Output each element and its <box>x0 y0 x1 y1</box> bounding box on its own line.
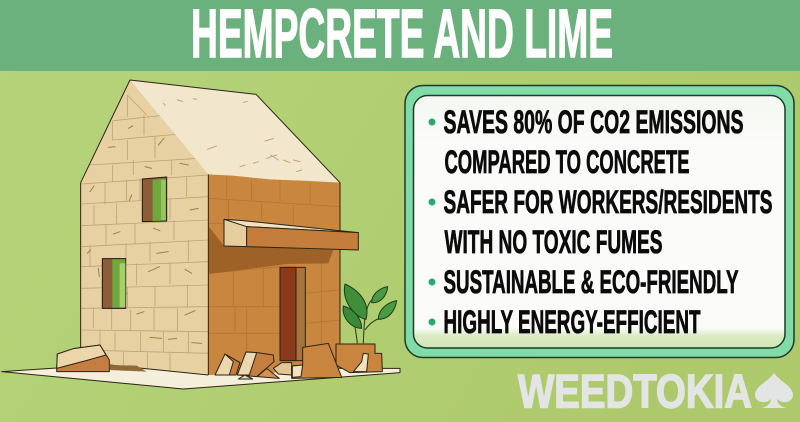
roof <box>130 80 340 183</box>
ground slab <box>2 353 400 389</box>
stone blocks <box>57 343 368 379</box>
left wall <box>81 80 208 375</box>
door <box>280 267 305 361</box>
panel inner <box>414 96 785 348</box>
panel frame <box>405 86 794 358</box>
rubble pile <box>215 343 368 379</box>
upper window <box>142 177 167 222</box>
ground shadow <box>110 365 147 372</box>
wall speckles <box>87 126 202 343</box>
info panel <box>405 86 794 358</box>
benefits text <box>444 104 772 340</box>
left boulder <box>57 345 109 372</box>
awning shadow <box>209 227 333 274</box>
bullet points <box>428 118 436 326</box>
lower window <box>102 259 126 308</box>
illustration: hempcrete house <box>2 80 400 389</box>
benefits text: WITH NO TOXIC FUMES <box>444 224 662 260</box>
house outline <box>81 80 340 375</box>
planter block <box>336 344 382 373</box>
awning <box>224 219 358 250</box>
right wall <box>208 174 340 375</box>
icon: spade <box>755 373 793 408</box>
plant <box>343 284 397 343</box>
header band <box>0 0 800 72</box>
watermark logo: WEEDTOKIA <box>518 364 752 418</box>
